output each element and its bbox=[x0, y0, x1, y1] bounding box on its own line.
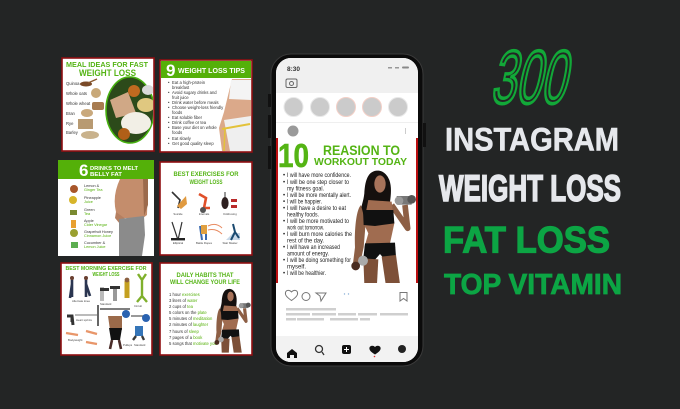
list: reasons: I will be one step closer to bbox=[287, 180, 350, 186]
side buttons bbox=[268, 94, 426, 169]
heading: BEST MORNING EXERCISE FOR bbox=[66, 266, 146, 272]
heading band: 9 bbox=[166, 61, 175, 80]
list: habits: 2 cups of tea bbox=[169, 304, 194, 309]
list: tips: • bbox=[168, 120, 170, 125]
image: man holding belly bbox=[115, 179, 148, 256]
heading: 10 bbox=[278, 137, 309, 174]
list: tips: • bbox=[168, 105, 170, 110]
list: reasons: • bbox=[283, 219, 285, 225]
heading: WORKOUT TODAY bbox=[314, 156, 407, 168]
list: grains: Rye bbox=[66, 121, 74, 126]
list: tips: Drink water before meals bbox=[172, 100, 219, 105]
status bar and top bar: 8:30 bbox=[287, 66, 300, 73]
heading: REASION TO bbox=[323, 143, 400, 158]
heading bbox=[174, 172, 239, 186]
list: habits: 5 colors on the plate bbox=[169, 310, 207, 315]
list: tips: Choose weight-loss friendly bbox=[172, 105, 224, 110]
list: tips: • bbox=[168, 125, 170, 130]
heading: WILL CHANGE YOUR LIFE bbox=[170, 280, 240, 286]
list: drinks: Pineapple bbox=[84, 196, 101, 200]
heading: meal ideas: MEAL IDEAS FOR FAST bbox=[66, 62, 149, 69]
status bar and top bar bbox=[276, 58, 418, 93]
labels: exercises: Circuit bbox=[134, 304, 142, 308]
list: habits: 1 hour exercises bbox=[169, 292, 200, 297]
list: drinks: Cucumber & bbox=[84, 241, 106, 245]
stories row bbox=[284, 98, 408, 116]
list: reasons: I will be more motivated to bbox=[287, 219, 350, 225]
labels: exercises: Pullups bbox=[123, 343, 133, 347]
list: drinks: Apple bbox=[84, 219, 94, 223]
heading: WEIGHT LOSS bbox=[92, 272, 120, 278]
list: drinks: Green bbox=[84, 208, 95, 212]
number: 300: 300 bbox=[486, 36, 579, 120]
list: drinks: Grapefruit Honey bbox=[84, 230, 113, 234]
list: habits bbox=[169, 292, 217, 346]
list: reasons bbox=[283, 173, 353, 277]
list: tips: Drink coffee or tea bbox=[172, 120, 207, 125]
heading band bbox=[58, 160, 154, 180]
list: tips: Eat soluble fiber bbox=[172, 115, 203, 120]
list: habits: 5 songs that motivate you bbox=[169, 341, 217, 346]
icons: exercises bbox=[171, 192, 240, 240]
list: reasons: I will burn more calories the bbox=[287, 232, 353, 238]
labels: exercises: Intervals bbox=[199, 212, 210, 216]
list: tips: • bbox=[168, 136, 170, 141]
heading band: DRINKS TO MELT bbox=[90, 166, 139, 172]
labels: exercises bbox=[68, 299, 146, 347]
heading band: BELLY FAT bbox=[90, 172, 123, 178]
list: reasons: • bbox=[283, 200, 285, 206]
list: tips: fruit juice bbox=[172, 95, 189, 100]
labels: exercises: Standard bbox=[134, 343, 146, 347]
list: tips: breakfast bbox=[172, 85, 190, 90]
heading: meal ideas: WEIGHT LOSS bbox=[79, 68, 136, 78]
panel: meal ideas for fast weight loss bbox=[62, 58, 155, 151]
icons: grain bowls bbox=[78, 79, 104, 139]
list: reasons: • bbox=[283, 232, 285, 238]
heading: DAILY HABITS THAT bbox=[176, 273, 234, 279]
labels: exercises: Battle Ropes bbox=[196, 241, 213, 245]
post header bbox=[276, 122, 418, 136]
image: woman with dumbbells bbox=[351, 171, 416, 284]
list: reasons: work out tomorrow. bbox=[286, 226, 324, 232]
heading bbox=[278, 137, 407, 174]
labels: exercises: Elliptical bbox=[173, 241, 184, 245]
panel: best morning exercise for weight loss bbox=[61, 263, 152, 355]
list: grains: Whole wheat bbox=[66, 101, 91, 106]
list: drinks: Lemon & bbox=[84, 184, 100, 188]
list: reasons: I will be doing something for bbox=[287, 258, 351, 264]
list: reasons: • bbox=[283, 245, 285, 251]
list: grains: Whole oats bbox=[66, 91, 87, 96]
list: reasons: rest of the day. bbox=[287, 238, 324, 244]
list: reasons: my fitness goal. bbox=[287, 186, 324, 192]
list: tips: Eat slowly bbox=[172, 136, 192, 141]
panel: 9 weight loss tips bbox=[160, 60, 252, 152]
bottom navigation bbox=[276, 336, 418, 362]
list: drinks: Ginger Tea bbox=[84, 188, 103, 192]
list: tips: • bbox=[168, 80, 170, 85]
panel: daily habits that will change your life bbox=[160, 263, 252, 355]
heading: meal ideas bbox=[66, 62, 149, 78]
panel: 6 drinks to melt belly fat bbox=[58, 160, 154, 256]
post action icons bbox=[285, 290, 407, 301]
heading band: WEIGHT LOSS TIPS bbox=[178, 66, 245, 75]
list: habits: 2 minutes of laughter bbox=[169, 322, 209, 327]
list: drinks: Cinnamon Juice bbox=[84, 234, 111, 238]
heading: WEIGHT LOSS bbox=[190, 180, 222, 186]
list: tips: • bbox=[168, 100, 170, 105]
list: reasons: myself. bbox=[287, 264, 306, 270]
heading band bbox=[161, 61, 251, 80]
list: drinks: Lemon Juice bbox=[84, 245, 106, 249]
labels: exercises: Heart sprints bbox=[76, 318, 92, 322]
panel: best exercises for weight loss bbox=[160, 162, 252, 255]
list: habits: 7 hours of sleep bbox=[169, 329, 199, 334]
image: slim waist with tape bbox=[219, 79, 251, 151]
list: habits: 7 pages of a book bbox=[169, 335, 203, 340]
list: tips: • bbox=[168, 141, 170, 146]
labels: exercises: Bodyweight bbox=[68, 338, 83, 342]
labels: exercises: Kickboxing bbox=[223, 212, 237, 216]
list: grains bbox=[66, 81, 91, 135]
post image: 10 reasons to workout today bbox=[276, 137, 418, 284]
image: woman with dumbbells bbox=[214, 289, 251, 353]
list: drinks bbox=[84, 184, 113, 249]
title: fat loss: FAT LOSS bbox=[443, 220, 610, 260]
list: reasons: I will have a desire to eat bbox=[287, 206, 346, 212]
list: tips: Base your diet on whole bbox=[172, 125, 217, 130]
labels: exercises: Standard bbox=[100, 302, 112, 306]
heading bbox=[170, 273, 240, 286]
list: reasons: I will be more mentally alert. bbox=[287, 193, 351, 199]
title: top vitamin: TOP VITAMIN bbox=[444, 269, 622, 301]
screen bbox=[276, 58, 418, 362]
list: tips: Get good quality sleep bbox=[172, 141, 214, 146]
list: reasons: • bbox=[283, 180, 285, 186]
list: reasons: I will be happier. bbox=[287, 200, 322, 206]
phone mockup bbox=[268, 54, 426, 366]
list: reasons: amount of energy. bbox=[287, 252, 329, 258]
labels: exercises: Alternate knee bbox=[72, 299, 90, 303]
labels: exercises bbox=[173, 212, 238, 245]
list: reasons: • bbox=[283, 258, 285, 264]
list: reasons: I will have an increased bbox=[287, 245, 340, 251]
list: drinks: Juice bbox=[84, 200, 93, 204]
heading band: 6 bbox=[79, 161, 88, 180]
figures: exercises bbox=[66, 274, 150, 349]
list: tips bbox=[168, 80, 224, 146]
phone body bbox=[271, 54, 423, 366]
list: reasons: I will have more confidence. bbox=[287, 173, 351, 179]
list: reasons: I will be healthier. bbox=[287, 271, 326, 277]
heading: BEST EXERCISES FOR bbox=[174, 172, 239, 178]
list: grains: Barley bbox=[66, 130, 79, 135]
list: grains: Quinoa bbox=[66, 81, 80, 86]
list: tips: • bbox=[168, 90, 170, 95]
labels: exercises: Suicide bbox=[173, 212, 183, 216]
caption placeholder lines bbox=[286, 308, 408, 320]
title: instagram: INSTAGRAM bbox=[445, 122, 619, 158]
list: reasons: • bbox=[283, 173, 285, 179]
list: reasons: • bbox=[283, 206, 285, 212]
image: food plate bbox=[106, 77, 155, 143]
list: tips: • bbox=[168, 115, 170, 120]
list: reasons: • bbox=[283, 271, 285, 277]
list: drinks: Cider Vinegar bbox=[84, 223, 108, 227]
list: reasons: • bbox=[283, 193, 285, 199]
list: habits: 5 minutes of meditation bbox=[169, 316, 213, 321]
list: tips: Eat a high-protein bbox=[172, 80, 206, 85]
list: tips: Avoid sugary drinks and bbox=[172, 90, 217, 95]
icons: drinks bbox=[69, 185, 78, 248]
list: grains: Bran bbox=[66, 111, 76, 116]
labels: exercises: Stair Master bbox=[222, 241, 238, 245]
list: tips: foods bbox=[172, 130, 182, 135]
list: tips: foods bbox=[172, 110, 182, 115]
list: drinks: Tea bbox=[84, 212, 91, 216]
heading bbox=[66, 266, 146, 278]
list: habits: 3 liters of water bbox=[169, 298, 198, 303]
list: reasons: healthy foods. bbox=[287, 212, 319, 218]
